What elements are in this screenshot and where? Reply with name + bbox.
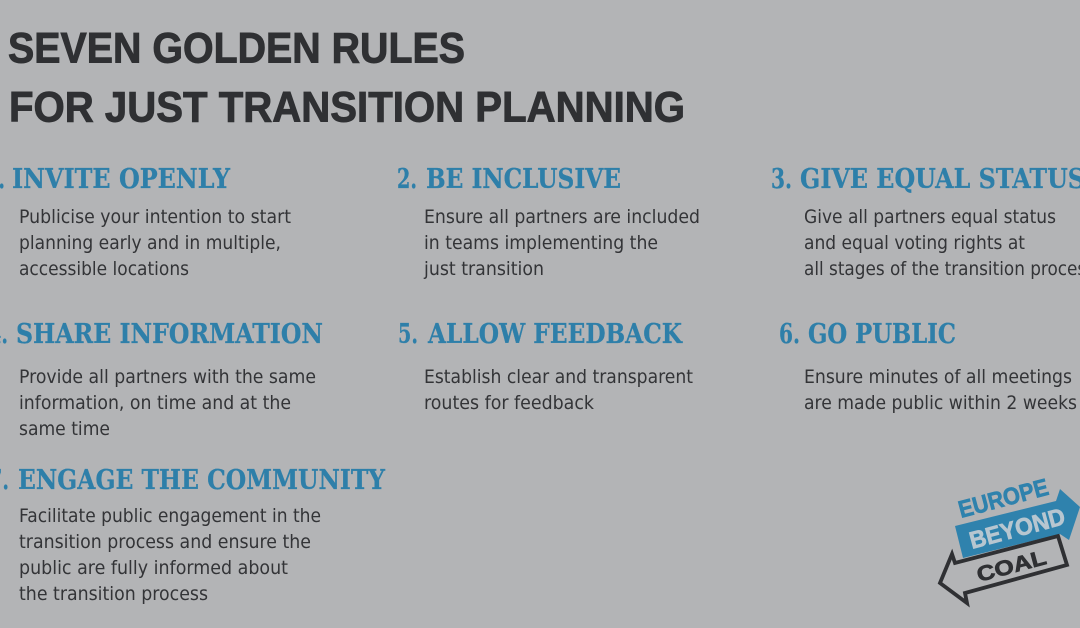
rule 6: go public: GO PUBLIC: [808, 319, 956, 350]
rule 7: engage the community: transition process and ensure the: [19, 531, 311, 553]
rule 7: engage the community: Facilitate public engagement in the: [19, 505, 321, 527]
rule 3: give equal status: [771, 164, 1080, 280]
rule 5: allow feedback: 5.: [398, 319, 418, 350]
rule 6: go public: [779, 319, 1077, 414]
rule 1: invite openly: accessible locations: [19, 258, 189, 280]
rule 2: be inclusive: 2.: [397, 164, 417, 195]
rule 2: be inclusive: [397, 164, 700, 280]
rule 5: allow feedback: [398, 319, 693, 414]
rule 7: engage the community: public are fully informed about: [19, 557, 288, 579]
rule 4: share information: [0, 319, 323, 440]
rule 7: engage the community: [0, 465, 386, 605]
rule 1: invite openly: [0, 164, 291, 280]
rule 1: invite openly: INVITE OPENLY: [12, 164, 231, 195]
title: FOR JUST TRANSITION PLANNING: [9, 84, 685, 132]
rule 5: allow feedback: Establish clear and transparent: [424, 366, 693, 388]
rule 6: go public: 6.: [779, 319, 800, 350]
rule 3: give equal status: 3.: [771, 164, 792, 195]
logo: Europe Beyond Coal: [940, 474, 1080, 603]
logo arrow: coal outline: [940, 536, 1067, 603]
rule 1: invite openly: planning early and in multiple,: [19, 232, 281, 254]
logo word: Coal: COAL: [974, 546, 1049, 587]
rule 3: give equal status: Give all partners equal status: [804, 206, 1056, 228]
rule 4: share information: SHARE INFORMATION: [16, 319, 323, 350]
rule 7: engage the community: ENGAGE THE COMMUNITY: [18, 465, 386, 496]
rule 2: be inclusive: just transition: [423, 258, 544, 280]
rule 4: share information: Provide all partners with the same: [19, 366, 316, 388]
rule 1: invite openly: Publicise your intention to start: [19, 206, 291, 228]
rule 4: share information: same time: [19, 418, 110, 440]
rule 7: engage the community: the transition process: [19, 583, 208, 605]
title: SEVEN GOLDEN RULES: [8, 24, 465, 72]
rule 3: give equal status: and equal voting rights at: [804, 232, 1025, 254]
rule 2: be inclusive: BE INCLUSIVE: [426, 164, 621, 195]
rule 5: allow feedback: routes for feedback: [424, 392, 594, 414]
logo word: Beyond: BEYOND: [967, 503, 1068, 555]
rule 4: share information: information, on time and at the: [19, 392, 291, 414]
logo word: Europe: EUROPE: [956, 474, 1051, 524]
logo arrow: blue: [955, 489, 1080, 558]
rule 5: allow feedback: ALLOW FEEDBACK: [427, 319, 683, 350]
rule 2: be inclusive: in teams implementing the: [424, 232, 658, 254]
title: [8, 24, 685, 132]
rule 2: be inclusive: Ensure all partners are included: [424, 206, 700, 228]
